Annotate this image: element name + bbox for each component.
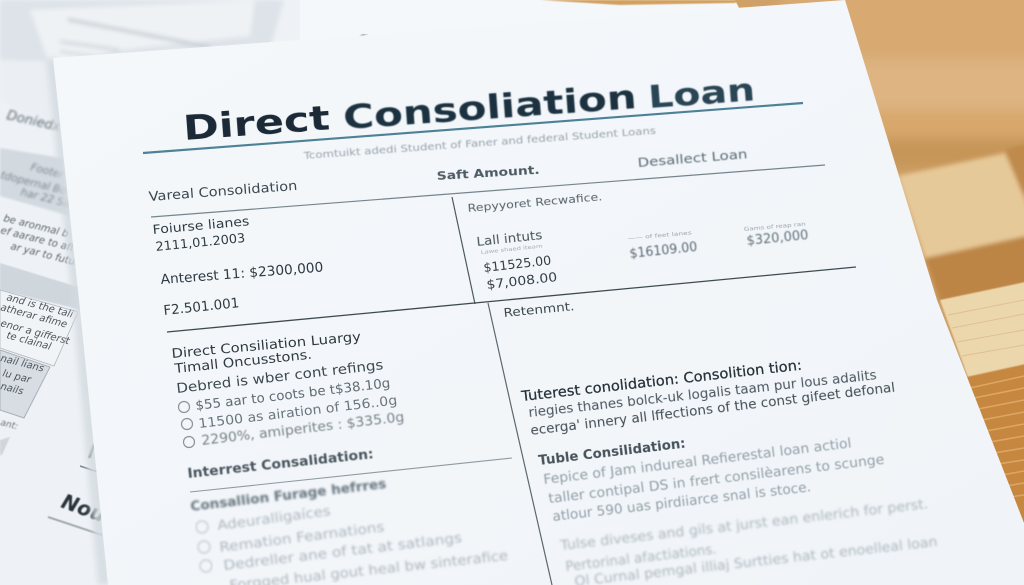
folded sheet notes: enor a gifferst [0,318,72,348]
back sheet of paper, top [270,0,742,60]
header: loan: Desallect Loan [637,147,748,170]
folded sheet notes [0,290,78,366]
figures column three: $320,000 [746,228,809,249]
table consolidation heading: Tuble Consilidation: [538,436,686,469]
left back sheets [0,0,300,585]
figures column one [476,228,558,292]
title [182,72,756,149]
soft shadow along main sheet edge [46,58,112,585]
features list [190,477,509,585]
table consolidation paragraph: taller contipal DS in frert consilèarens to scunge [548,452,885,507]
left sheet body text: ef aarare to aft [0,225,76,254]
right heading: Tuterest conolidation: Consolition tion: [520,358,803,405]
grey note box: nail lians [0,353,45,375]
table consolidation paragraph [543,435,885,525]
left cell: dates and amounts [152,213,324,319]
block bullets: 2290%, amiperites : $335.0g [201,410,405,449]
figures column two: —— of feet lanes [628,230,693,242]
heading on bottom left sheet: Nou [58,489,109,527]
features items: Dedreller ane of tat at satlangs [223,530,463,574]
right paragraph one: riegies thanes bolck-uk logalis taam pur lous adalits [528,368,878,421]
table header row [148,147,748,205]
right column text block [520,358,938,585]
small note fragments [0,418,19,455]
figures column one: Lall intuts [476,228,543,249]
grey band below body text [0,263,82,310]
block bullets [195,376,405,449]
wooden table background [500,0,1024,585]
title: Loan [647,72,756,116]
table consolidation paragraph: Fepice of Jam indureal Refierestal loan actiol [543,435,852,488]
block intro: Debred is wber cont refings [176,357,384,397]
left sheet heading: Doniedx [5,108,62,135]
figures column two: $16109.00 [629,240,698,262]
grey table band on left sheet [0,148,70,216]
right paragraph two: ecerga' innery all lffections of the const gifeet defonal [530,381,896,439]
figures column two [628,230,698,262]
wood sliver above the back sheet [540,0,740,5]
grey table labels: Footer [29,161,66,181]
folded sheet notes: te clainal [5,330,52,353]
small stroke on left sheet [80,466,98,472]
grey table labels [0,161,71,210]
title: Direct [182,98,331,149]
grey note box: nails [0,381,24,398]
partial heading peeking behind main sheet [356,35,377,44]
features heading: Consallion Furage hefrres [190,477,387,515]
small letter fragment on left sheet [88,444,95,458]
block bullets: $55 aar to coots be t$38.10g [195,376,391,414]
grey table labels: tdopernal Bo [0,169,68,197]
features icons [196,521,212,572]
repayment heading: Repyyoret Recwafice. [467,190,603,215]
features items: Remation Fearnations [218,519,385,556]
left sheet body text [0,213,81,269]
top left form with grey header [0,0,284,130]
underline below left heading [48,517,102,535]
features items: Adeuralligaíces [216,503,332,534]
closing paragraph [559,496,938,585]
subtitle: Tcomtuikt adedi Student of Faner and federal Student Loans [302,126,656,162]
retirement label: Retenmnt. [503,299,575,320]
left cell: dates and amounts: F2.501.001 [163,295,240,319]
folded sheet notes: atherar afime [0,302,68,331]
folded sheet notes: and is the tali [5,292,74,321]
interest consolidation heading: Interrest Consalidation: [187,447,374,482]
block subheading: Timall Oncusstons. [173,348,313,377]
grey note box [0,350,50,418]
bullet icons [178,402,194,448]
table consolidation paragraph: atlour 590 uas pirdiiarce snal is stoce. [552,479,812,525]
header: amount: Saft Amount. [436,163,540,183]
closing paragraph: Pertorinal afactiations. [565,541,717,575]
title: Consoliation [342,77,638,137]
left sheet body text: ar yar to futur [9,241,81,269]
figures column one: $7,008.00 [486,269,558,292]
block heading: Direct Consiliation Luargy [171,330,362,362]
grey table labels: har 22 Sa [19,186,71,210]
left sheet body text: be aronmal b [2,213,70,240]
right cell: repayment figures [467,190,809,292]
lower left text block [171,330,405,449]
left cell: dates and amounts: Foiurse lianes [152,213,250,237]
figures column three: Gams of reap ran [744,222,806,233]
features items [216,503,509,585]
figures column one: Lawe shaed iteam [481,244,543,256]
table grid lines [151,165,856,585]
figures column one: $11525.00 [483,252,552,275]
left cell: dates and amounts: Anterest 11: $2300,000 [160,260,324,288]
block bullets: 11500 as airation of 156..0g [198,393,398,432]
header: consolidation: Vareal Consolidation [148,179,298,205]
grey note box: lu par [1,368,33,386]
closing paragraph: Tulse diveses and gils at jurst ean enlerich for perst. [559,496,929,554]
title underline [143,103,803,153]
left cell: dates and amounts: 2111,01.2003 [155,230,246,254]
